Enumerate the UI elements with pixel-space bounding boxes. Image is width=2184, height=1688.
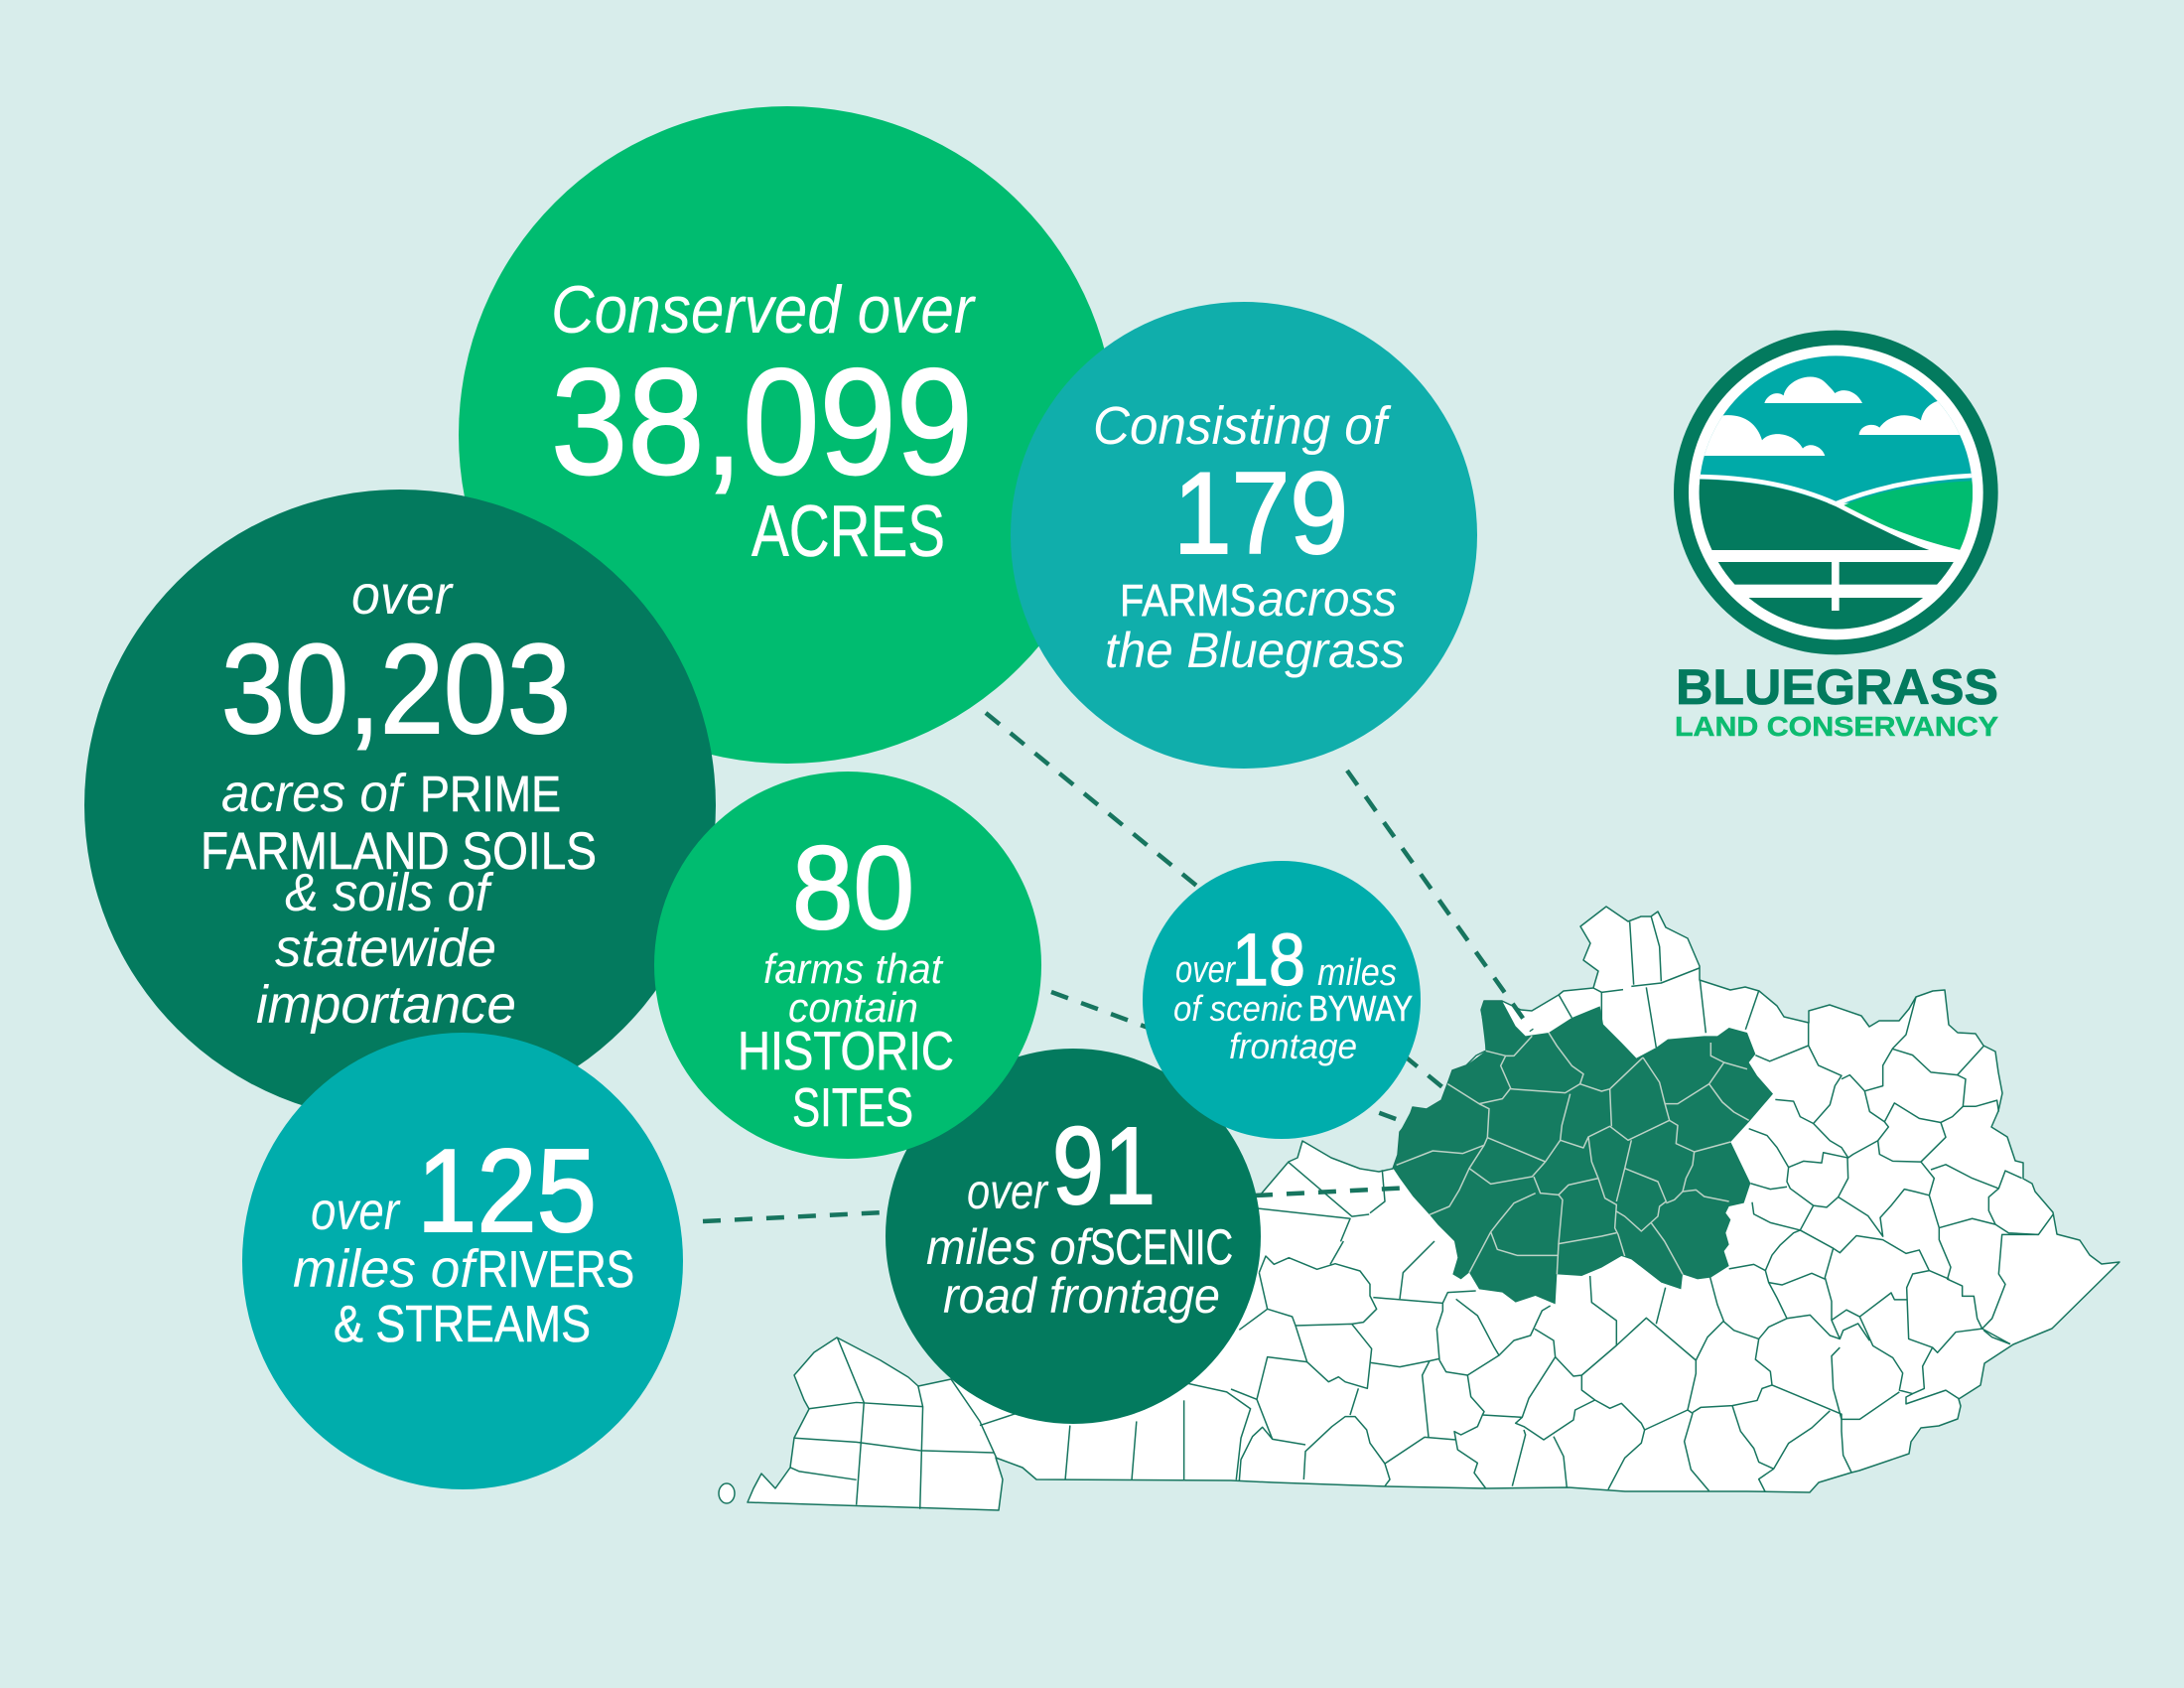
panel: 38,099 acres bbox=[459, 106, 1116, 764]
panel: 38,099 acres: Conserved over bbox=[551, 272, 976, 348]
panel: 30,203 acres prime farmland: over bbox=[351, 563, 454, 626]
dashed connector lines bbox=[703, 713, 1532, 1221]
panel: 18 miles byway: of scenic bbox=[1173, 988, 1302, 1029]
map: Kentucky counties bbox=[719, 907, 2119, 1510]
panel: 125 miles rivers: miles of bbox=[293, 1239, 479, 1299]
panel: 18 miles byway: over bbox=[1175, 949, 1236, 991]
panel: 80 historic farms: farms that bbox=[763, 945, 944, 992]
panel: 30,203 acres prime farmland: statewide bbox=[275, 918, 496, 978]
panel: 80 historic farms: SITES bbox=[792, 1076, 913, 1138]
county lines south central bbox=[1231, 1241, 1724, 1491]
panel: 80 historic farms: 80 bbox=[792, 822, 914, 954]
panel: 18 miles byway bbox=[1143, 861, 1421, 1139]
highlighted Bluegrass region bbox=[1393, 1001, 1773, 1304]
panel: 18 miles byway: 18 bbox=[1232, 918, 1305, 1001]
panel: 30,203 acres prime farmland: importance bbox=[256, 975, 516, 1035]
county lines east bbox=[1693, 980, 2053, 1492]
panel: 125 miles rivers: & STREAMS bbox=[334, 1296, 591, 1353]
panel: 18 miles byway: BYWAY bbox=[1308, 988, 1413, 1029]
panel: 125 miles rivers bbox=[242, 1033, 683, 1489]
icon: landscape badge bbox=[1674, 331, 1998, 654]
logo wordmark: BLUEGRASS bbox=[1676, 659, 1998, 715]
panel: 179 farms: across bbox=[1258, 571, 1397, 627]
panel: 18 miles byway: miles bbox=[1317, 952, 1397, 994]
state outline bbox=[748, 907, 2119, 1510]
panel: 179 farms bbox=[1011, 302, 1477, 769]
panel: 125 miles rivers: 125 bbox=[417, 1125, 597, 1257]
panel: 30,203 acres prime farmland: FARMLAND SOILS bbox=[201, 822, 597, 881]
panel: 30,203 acres prime farmland: & soils of bbox=[285, 863, 494, 922]
county lines north and central bbox=[1370, 916, 1700, 1213]
logo tagline: LAND CONSERVANCY bbox=[1675, 711, 1998, 742]
panel: 80 historic farms: contain bbox=[788, 984, 918, 1031]
panel: 91 miles scenic road: 91 bbox=[1052, 1105, 1156, 1227]
panel: 179 farms: Consisting of bbox=[1093, 396, 1392, 456]
panel: 18 miles byway: frontage bbox=[1229, 1026, 1357, 1066]
panel: 179 farms: 179 bbox=[1173, 448, 1348, 578]
panel: 80 historic farms: HISTORIC bbox=[738, 1020, 954, 1081]
county lines west bbox=[790, 1162, 1369, 1509]
panel: 30,203 acres prime farmland: 30,203 bbox=[221, 619, 571, 761]
panel: 38,099 acres: ACRES bbox=[751, 492, 945, 572]
panel: 91 miles scenic road: over bbox=[967, 1164, 1049, 1219]
panel: 91 miles scenic road: road frontage bbox=[943, 1268, 1220, 1324]
panel: 30,203 acres prime farmland: PRIME bbox=[420, 766, 561, 822]
island bbox=[719, 1483, 735, 1503]
panel: 91 miles scenic road: SCENIC bbox=[1090, 1219, 1233, 1275]
panel: 91 miles scenic road bbox=[886, 1049, 1261, 1424]
panel: 38,099 acres: 38,099 bbox=[551, 338, 973, 506]
panel: 179 farms: FARMS bbox=[1120, 575, 1256, 626]
panel: 125 miles rivers: RIVERS bbox=[478, 1241, 634, 1299]
panel: 91 miles scenic road: miles of bbox=[926, 1219, 1094, 1275]
panel: 30,203 acres prime farmland bbox=[84, 490, 716, 1121]
panel: 80 historic farms bbox=[654, 772, 1041, 1159]
panel: 30,203 acres prime farmland: acres of bbox=[221, 764, 407, 823]
panel: 179 farms: the Bluegrass bbox=[1105, 623, 1405, 678]
panel: 125 miles rivers: over bbox=[311, 1182, 401, 1241]
logo: Bluegrass Land Conservancy bbox=[1674, 331, 1998, 742]
